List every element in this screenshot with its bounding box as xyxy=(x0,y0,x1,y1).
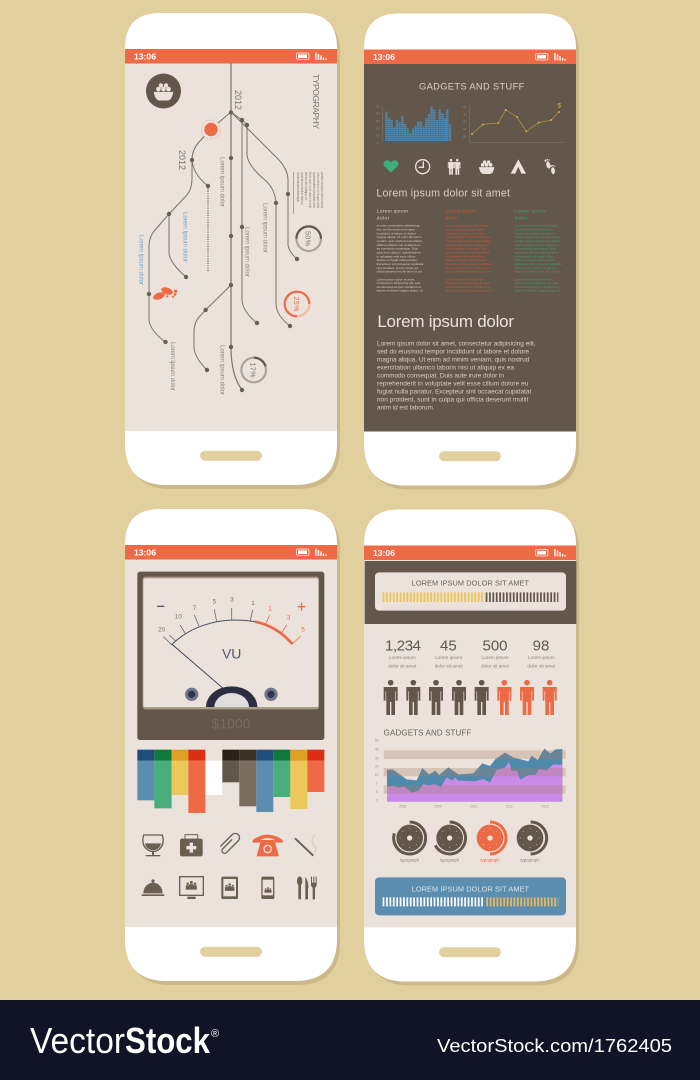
ring: 17% xyxy=(241,358,266,382)
bar chart: 50 xyxy=(376,104,380,108)
ring: 25% xyxy=(285,292,309,316)
line chart: 30 xyxy=(463,120,467,124)
icon: bowl badge xyxy=(146,74,181,108)
footer url: VectorStock.com/1762405 xyxy=(437,1036,672,1056)
heading: gadgets: GADGETS AND STUFF xyxy=(384,729,471,738)
area chart: 5 xyxy=(376,790,378,794)
column 2: dolor xyxy=(446,216,459,222)
ring: 50% xyxy=(296,226,321,251)
column 3: consectetur adipisicing elit, sed xyxy=(515,281,558,285)
rotated small text block: reprehenderit in voluptate esse xyxy=(312,172,316,208)
ring: 50%: 50% xyxy=(304,231,310,246)
icon: tablet xyxy=(221,877,238,899)
rotated labels: Lorem ipsum dolor xyxy=(138,235,144,285)
column 3: ut enim consectetur adipisicing xyxy=(515,224,558,228)
icon: medical kit xyxy=(180,835,203,856)
blue progress panel: LOREM IPSUM DOLOR SIT AMET xyxy=(412,885,530,894)
footer bar xyxy=(0,1000,700,1080)
heading: lorem sit amet: Lorem ipsum dolor sit amet xyxy=(376,188,510,200)
column 1: dolore eu fugiat nulla pariatur. xyxy=(377,258,418,262)
panel: phone gadgets xyxy=(364,14,579,490)
rotated small text block: cillum dolore eu fugiat nulla xyxy=(316,172,320,208)
bar chart: 10 xyxy=(376,134,380,138)
column 1: Lorem ipsum dolor sit amet, xyxy=(377,277,415,281)
stat numbers: 45 xyxy=(440,637,457,654)
year labels: 2012 xyxy=(233,90,243,110)
area chart: 2012 xyxy=(541,804,549,808)
column 1: ut enim consectetur adipisicing xyxy=(377,224,420,228)
red timeline marker xyxy=(202,120,220,139)
needle xyxy=(172,644,225,690)
paragraph: sed do eiusmod tempor incididunt ut labore et dolore xyxy=(377,349,529,356)
gauge captions: typograph xyxy=(440,858,460,863)
column 3: Excepteur sint occaecat cupidatat xyxy=(515,262,562,266)
area chart: 2010 xyxy=(470,804,478,808)
column 3: in voluptate velit esse cillum xyxy=(515,254,554,258)
column 3: labore et dolore magna aliqua. Ut xyxy=(515,289,561,293)
column 2: elit, sed do eiusmod tempor xyxy=(446,227,484,231)
column 2 xyxy=(446,208,493,293)
gauge arc xyxy=(163,608,301,645)
column 1: ea commodo consequat. Duis xyxy=(377,247,418,251)
registered mark: ® xyxy=(211,1028,219,1040)
icon: smartphone xyxy=(261,877,274,899)
rotated labels: Lorem ipsum dolor xyxy=(218,157,226,207)
gauge numbers: 5 xyxy=(213,598,217,605)
dark screen xyxy=(364,64,576,432)
column 1: in voluptate velit esse cillum xyxy=(377,254,416,258)
bar chart: 0 xyxy=(377,141,379,145)
screws xyxy=(185,688,278,701)
bar chart: 40 xyxy=(376,112,380,116)
paragraph: anim id est laborum. xyxy=(377,405,435,412)
hub xyxy=(206,686,257,707)
column 2: non proident, sunt in culpa qui xyxy=(446,266,488,270)
column 3 xyxy=(515,208,562,293)
icon: telephone xyxy=(253,835,283,856)
rotated small text block: nostrud exercitation ullamco xyxy=(300,172,304,205)
column 3: do eiusmod tempor incididunt ut xyxy=(515,285,559,289)
area chart: 2008 xyxy=(399,804,407,808)
top section xyxy=(365,561,576,715)
column 1: non proident, sunt in culpa qui xyxy=(377,266,419,270)
gauge numbers: 10 xyxy=(175,614,182,621)
paragraph: commodo consequat. Duis aute irure dolor in xyxy=(377,373,504,380)
panel: phone dashboard xyxy=(364,510,579,986)
column 3: non proident, sunt in culpa qui xyxy=(515,266,557,270)
column 1: elit, sed do eiusmod tempor xyxy=(377,227,415,231)
upper content xyxy=(376,82,564,175)
phone body 3 xyxy=(125,509,340,985)
line chart: $ xyxy=(557,103,561,110)
column 3: incididunt ut labore et dolore xyxy=(515,231,554,235)
gauge 3 xyxy=(477,822,506,854)
bar chart: 30 xyxy=(376,119,380,123)
stat captions: dolor sit amet xyxy=(481,664,510,669)
column 3: dolore eu fugiat nulla pariatur. xyxy=(515,258,556,262)
dotted line xyxy=(207,186,209,272)
line chart: 50 xyxy=(463,105,467,109)
gauge captions: typograph xyxy=(480,858,500,863)
stat numbers: 98 xyxy=(533,637,549,654)
gauge 1 xyxy=(394,822,426,854)
column 3: ullamco laboris nisi ut aliquip ex xyxy=(515,243,559,247)
rotated labels xyxy=(138,157,268,395)
icon: cloche xyxy=(142,879,164,896)
area chart: 20 xyxy=(375,764,379,768)
column 2: Excepteur sint occaecat cupidatat xyxy=(446,262,493,266)
column 1: magna aliqua. Ut enim ad minim xyxy=(377,235,422,239)
gauge numbers: 1 xyxy=(268,606,272,613)
column 1: dolor xyxy=(377,216,390,222)
rotated small text block xyxy=(294,172,324,214)
column 1 xyxy=(377,208,424,293)
column 3: Lorem ipsum xyxy=(515,208,546,214)
gauge 4 xyxy=(517,822,547,854)
icon: orange feet xyxy=(152,285,178,302)
stat numbers: 1,234 xyxy=(385,637,421,654)
gauge captions xyxy=(400,858,540,863)
column 2: ea commodo consequat. Duis xyxy=(446,247,487,251)
stat numbers xyxy=(385,637,549,654)
stat captions xyxy=(388,655,556,669)
column 3: ea commodo consequat. Duis xyxy=(515,247,556,251)
rotated small text block: laboris nisi ut aliquip ex xyxy=(304,172,308,200)
VU label: VU xyxy=(222,645,241,661)
column 1: labore et dolore magna aliqua. Ut xyxy=(377,289,423,293)
stat captions: dolor sit amet xyxy=(527,664,556,669)
VU meter xyxy=(137,572,324,740)
rotated labels: Lorem ipsum dolor xyxy=(244,227,250,277)
column 1: aute irure dolor in reprehenderit xyxy=(377,250,421,254)
blue progress panel xyxy=(375,877,566,915)
column 1: officia deserunt mollit anim id est xyxy=(377,270,422,274)
icon: clock xyxy=(416,160,430,174)
heading: typography: TYPOGRAPHY xyxy=(311,74,321,129)
icon: tent xyxy=(511,159,526,174)
ring: 25%: 25% xyxy=(292,296,299,312)
paragraph: magna aliqua. Ut enim ad minim veniam, quis nostrud xyxy=(377,357,530,364)
year labels xyxy=(177,90,243,170)
column 2: aute irure dolor in reprehenderit xyxy=(446,250,490,254)
column 1: Lorem ipsum xyxy=(377,208,408,214)
gauge 2 xyxy=(435,822,466,854)
area chart: 7 xyxy=(376,782,378,786)
column 3: elit, sed do eiusmod tempor xyxy=(515,227,553,231)
line chart: 20 xyxy=(463,127,467,131)
area chart: 30 xyxy=(375,756,379,760)
column 1: Excepteur sint occaecat cupidatat xyxy=(377,262,424,266)
icon: cigarette xyxy=(295,835,316,856)
ring: 17%: 17% xyxy=(248,362,256,378)
icon: bowl xyxy=(479,160,494,174)
area chart xyxy=(375,739,566,808)
paragraph: reprehenderit in voluptate velit esse cillum dolore eu xyxy=(377,381,529,388)
gauge numbers: 1 xyxy=(251,600,255,607)
area chart: 2009 xyxy=(434,804,442,808)
column 2: do eiusmod tempor incididunt ut xyxy=(446,285,490,289)
paragraph: non proident, sunt in culpa qui officia deserunt mollit xyxy=(377,397,529,404)
phone body 1 xyxy=(125,13,340,489)
column 1: veniam, quis nostrud exercitation xyxy=(377,239,423,243)
column 2: dolore eu fugiat nulla pariatur. xyxy=(446,258,487,262)
gauge numbers: 5 xyxy=(301,627,305,634)
footer logo bold: Stock xyxy=(125,1020,211,1061)
column 2: ullamco laboris nisi ut aliquip ex xyxy=(446,243,490,247)
progress panel xyxy=(375,572,566,611)
timeline lines xyxy=(149,63,297,390)
column 1: ullamco laboris nisi ut aliquip ex xyxy=(377,243,421,247)
line chart: 40 xyxy=(463,112,467,116)
minus and plus xyxy=(157,604,164,608)
rotated labels: Lorem ipsum dolor xyxy=(182,212,188,262)
column 2: in voluptate velit esse cillum xyxy=(446,254,485,258)
rotated small text block: pariatur excepteur sint occaecat xyxy=(320,172,324,208)
heading: gadgets: GADGETS AND STUFF xyxy=(419,82,525,92)
gauge numbers xyxy=(158,596,305,634)
gauge captions: typograph xyxy=(520,858,540,863)
phone body 4 xyxy=(364,510,579,986)
column 2: Lorem ipsum xyxy=(446,208,477,214)
phone body 2 xyxy=(364,14,579,490)
rotated labels: Lorem ipsum dolor xyxy=(262,203,268,253)
column 3: veniam, quis nostrud exercitation xyxy=(515,239,561,243)
column 2: ut enim consectetur adipisicing xyxy=(446,224,489,228)
column 3: dolor xyxy=(515,216,528,222)
line chart xyxy=(463,103,564,142)
column 1: consectetur adipisicing elit, sed xyxy=(377,281,420,285)
column 3: magna aliqua. Ut enim ad minim xyxy=(515,235,560,239)
stat captions: Lorem ipsum xyxy=(528,655,555,660)
column 2: Lorem ipsum dolor sit amet, xyxy=(446,277,484,281)
stat captions: Lorem ipsum xyxy=(389,655,416,660)
gauge numbers: 20 xyxy=(158,627,166,634)
paragraph: fugiat nulla pariatur. Excepteur sint occaecat cupidatat xyxy=(377,389,532,396)
icon: wine glass xyxy=(143,835,163,856)
rotated labels: Lorem ipsum dolor xyxy=(218,345,226,395)
column 3: officia deserunt mollit anim id est xyxy=(515,270,560,274)
rotated labels: Lorem ipsum dolor xyxy=(169,342,176,391)
area chart: 2011 xyxy=(506,804,513,808)
people row xyxy=(384,680,557,715)
icon: paper clip xyxy=(218,832,241,854)
heading: lorem ipsum dolor: Lorem ipsum dolor xyxy=(377,312,514,331)
gauge numbers: 3 xyxy=(230,596,234,603)
column 1: do eiusmod tempor incididunt ut xyxy=(377,285,421,289)
paragraph: exercitation ullamco laboris nisi ut aliquip ex ea xyxy=(377,365,514,372)
column 2: veniam, quis nostrud exercitation xyxy=(446,239,492,243)
column 3: Lorem ipsum dolor sit amet, xyxy=(515,277,553,281)
icon: monitor xyxy=(180,877,203,899)
lower section xyxy=(375,729,566,915)
gauge captions: typograph xyxy=(400,858,420,863)
column 1: incididunt ut labore et dolore xyxy=(377,231,416,235)
year labels: 2012 xyxy=(177,150,187,170)
lower content xyxy=(376,188,562,412)
stat captions: dolor sit amet xyxy=(388,664,417,669)
area chart: 50 xyxy=(375,739,379,743)
paragraph: Lorem ipsum dolor sit amet, consectetur adipisicing elit, xyxy=(377,341,536,348)
column 2: incididunt ut labore et dolore xyxy=(446,231,485,235)
area chart: 10 xyxy=(375,773,379,777)
icon: feet xyxy=(544,158,556,174)
timeline dots xyxy=(147,110,299,392)
area chart: 40 xyxy=(375,748,379,752)
stat numbers: 500 xyxy=(482,637,508,654)
stat captions: Lorem ipsum xyxy=(435,655,462,660)
stat captions: Lorem ipsum xyxy=(482,655,509,660)
column 2: magna aliqua. Ut enim ad minim xyxy=(446,235,491,239)
colour bars xyxy=(137,750,324,813)
area chart: 0 xyxy=(376,799,378,803)
paragraph xyxy=(377,341,536,412)
panel: phone timeline xyxy=(125,13,340,489)
gauge numbers: 7 xyxy=(193,605,197,612)
bar chart: 20 xyxy=(376,126,380,130)
column 2: officia deserunt mollit anim id est xyxy=(446,270,491,274)
bar chart xyxy=(376,104,450,145)
panel: phone VU meter xyxy=(125,509,340,985)
column 3: aute irure dolor in reprehenderit xyxy=(515,250,559,254)
footer logo: Vector xyxy=(30,1020,125,1061)
line chart: 10 xyxy=(463,134,467,138)
rotated small text block: Duis aute irure dolor in velit xyxy=(308,172,312,208)
icon: cutlery xyxy=(297,876,317,899)
stat captions: dolor sit amet xyxy=(435,664,463,669)
icon grid xyxy=(142,832,317,899)
column 2: consectetur adipisicing elit, sed xyxy=(446,281,489,285)
icon: people xyxy=(448,159,460,175)
gauge numbers: 3 xyxy=(287,615,291,622)
column 2: labore et dolore magna aliqua. Ut xyxy=(446,289,492,293)
rotated small text block: Ut enim ad minim veniam quis xyxy=(296,172,300,202)
progress panel: LOREM IPSUM DOLOR SIT AMET xyxy=(412,578,530,587)
price: $1000 xyxy=(212,715,251,731)
icon: heart xyxy=(383,160,399,173)
